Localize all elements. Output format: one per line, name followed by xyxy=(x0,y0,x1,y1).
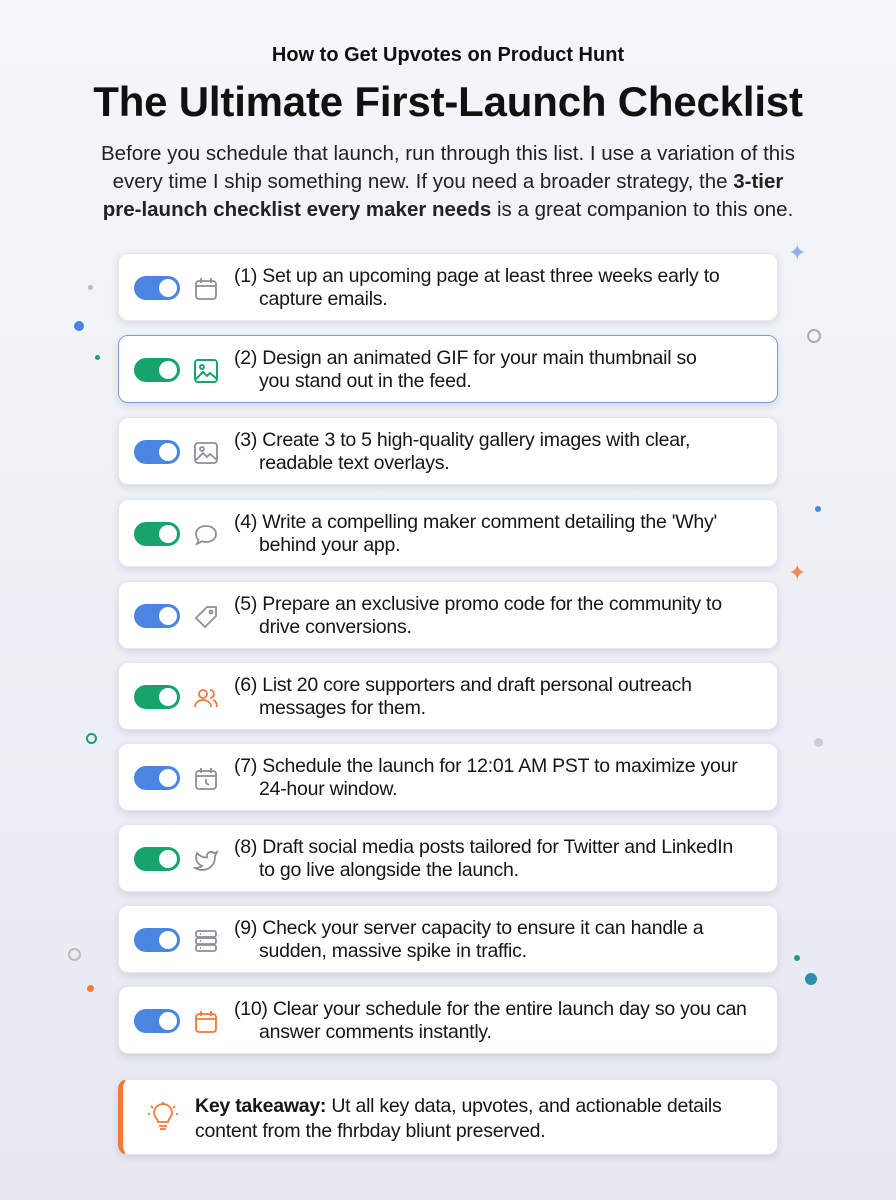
card 4: behind your app. xyxy=(259,534,400,556)
card 9 xyxy=(118,905,778,973)
icon: calendar xyxy=(195,278,217,300)
icon: gallery xyxy=(194,442,218,464)
intro paragraph xyxy=(101,142,795,221)
card 4 xyxy=(118,499,778,567)
card 7: 24-hour window. xyxy=(259,778,397,800)
card 2 xyxy=(118,335,778,403)
card 5: drive conversions. xyxy=(259,616,412,638)
card 10: answer comments instantly. xyxy=(259,1021,492,1043)
title: The Ultimate First-Launch Checklist xyxy=(93,78,803,125)
card 6: (6) List 20 core supporters and draft personal outreach xyxy=(234,674,692,696)
subtitle: How to Get Upvotes on Product Hunt xyxy=(272,44,624,66)
card 9: (9) Check your server capacity to ensure it can handle a xyxy=(234,917,703,939)
card 3 xyxy=(118,417,778,485)
card 6: messages for them. xyxy=(259,697,426,719)
card 8: (8) Draft social media posts tailored for Twitter and LinkedIn xyxy=(234,836,733,858)
card 1: (1) Set up an upcoming page at least three weeks early to xyxy=(234,265,719,287)
card 3: (3) Create 3 to 5 high-quality gallery images with clear, xyxy=(234,429,690,451)
card 7: (7) Schedule the launch for 12:01 AM PST to maximize your xyxy=(234,755,737,777)
card 3: readable text overlays. xyxy=(259,452,449,474)
callout: key takeaway: Key takeaway: Ut all key data, upvotes, and actionable details xyxy=(195,1095,722,1117)
icon: calendar orange xyxy=(195,1011,217,1033)
icon: users xyxy=(194,689,218,707)
card 5: (5) Prepare an exclusive promo code for the community to xyxy=(234,593,722,615)
card 10 xyxy=(118,986,778,1054)
icon: tag xyxy=(194,606,217,628)
card 8: to go live alongside the launch. xyxy=(259,859,519,881)
card 10: (10) Clear your schedule for the entire launch day so you can xyxy=(234,998,747,1020)
intro paragraph: pre-launch checklist every maker needs is a great companion to this one. xyxy=(103,198,793,221)
card 2: (2) Design an animated GIF for your main thumbnail so xyxy=(234,347,697,369)
text: ✦ xyxy=(788,240,806,265)
callout: key takeaway: content from the fhrbday bliunt preserved. xyxy=(195,1120,545,1142)
icon: calendar clock xyxy=(195,768,217,790)
text: ✦ xyxy=(788,560,806,585)
icon: lightbulb xyxy=(148,1102,178,1130)
card 1: capture emails. xyxy=(259,288,387,310)
card 2: you stand out in the feed. xyxy=(259,370,472,392)
callout: key takeaway xyxy=(118,1079,778,1155)
card 8 xyxy=(118,824,778,892)
card 1 xyxy=(118,253,778,321)
decorative dots xyxy=(74,321,84,331)
card 4: (4) Write a compelling maker comment detailing the 'Why' xyxy=(234,511,717,533)
icon: twitter bird xyxy=(193,850,219,871)
card 9: sudden, massive spike in traffic. xyxy=(259,940,527,962)
icon: server xyxy=(195,930,217,952)
intro paragraph: Before you schedule that launch, run through this list. I use a variation of this xyxy=(101,142,795,165)
icon: comment xyxy=(195,525,217,546)
card 7 xyxy=(118,743,778,811)
icon: image xyxy=(194,359,218,383)
intro paragraph: every time I ship something new. If you need a broader strategy, the 3-tier xyxy=(113,170,783,193)
card 5 xyxy=(118,581,778,649)
card 6 xyxy=(118,662,778,730)
